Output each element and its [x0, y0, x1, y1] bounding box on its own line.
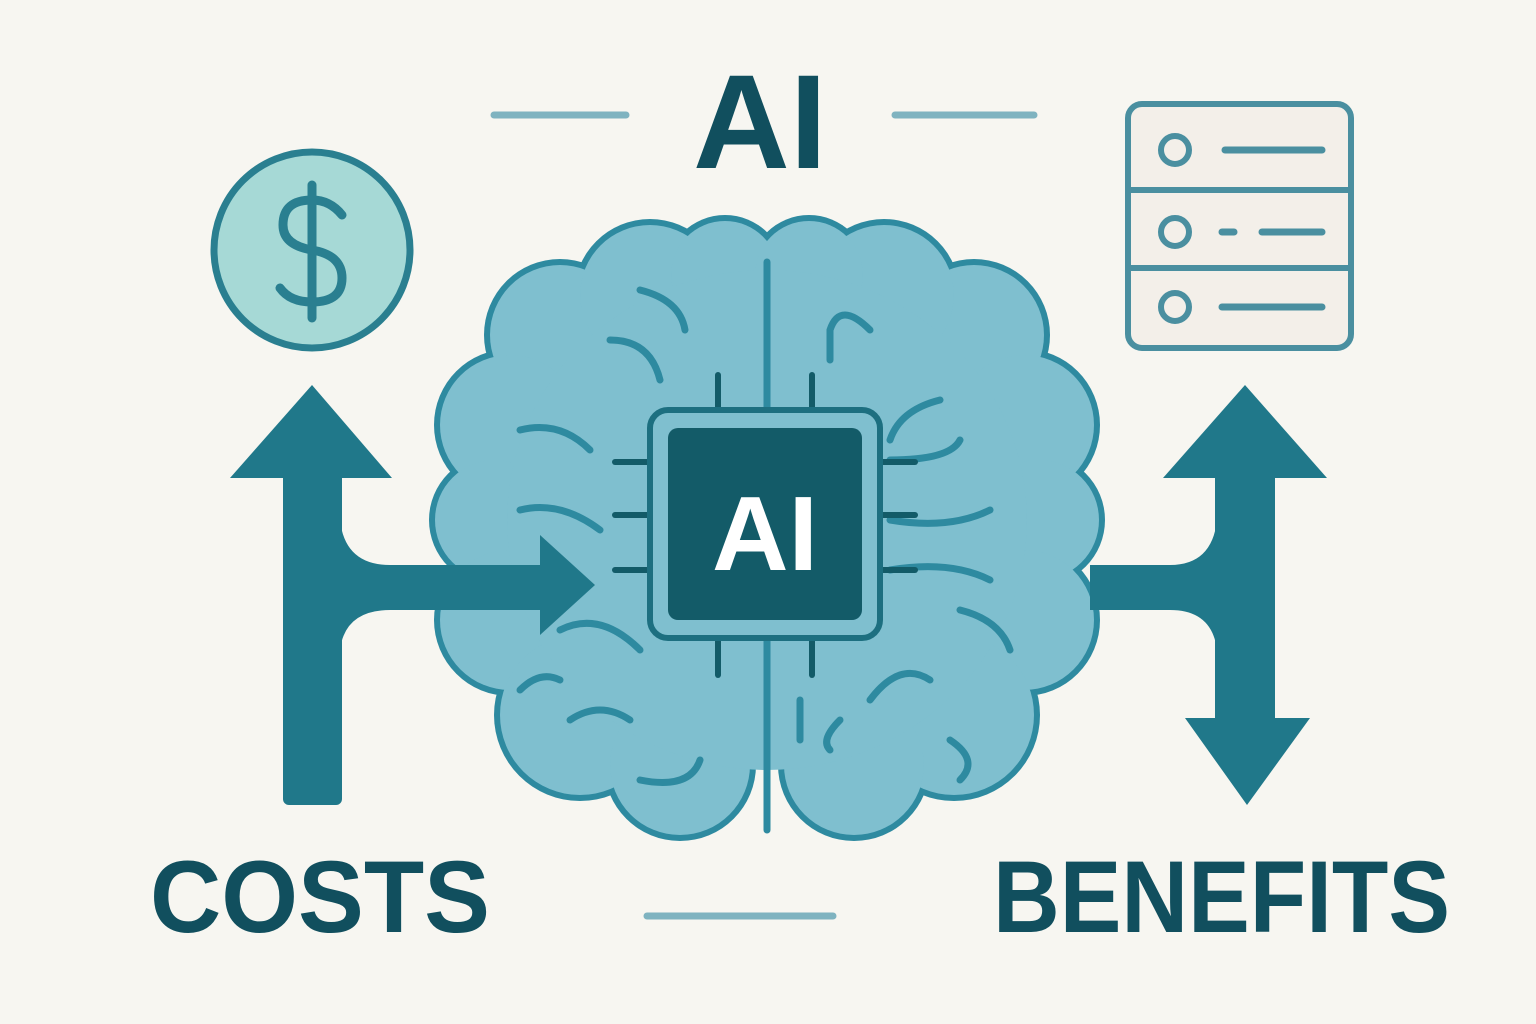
label: benefits: BENEFITS [993, 840, 1450, 954]
icon: server list [1128, 104, 1351, 348]
chip: AI [712, 475, 818, 593]
arrow: costs up with branch [230, 385, 595, 805]
title: AI [693, 48, 827, 197]
label: costs: COSTS [150, 840, 490, 954]
brain [429, 215, 1105, 841]
chip [615, 375, 915, 675]
icon: dollar coin [214, 152, 410, 348]
arrow: benefits up/down with branch [1090, 385, 1327, 805]
bottom divider [647, 912, 833, 920]
